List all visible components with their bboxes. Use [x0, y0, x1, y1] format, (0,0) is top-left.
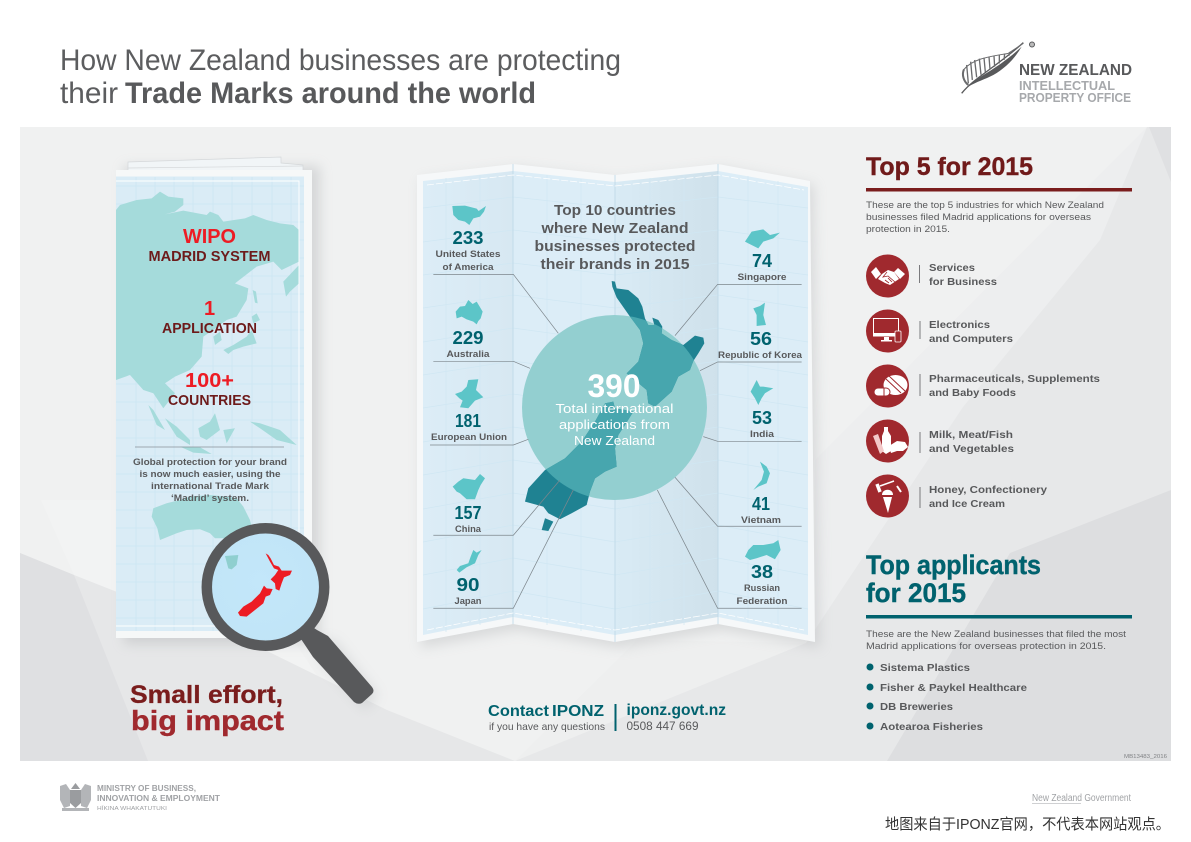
- heading: Top 5 for 2015: [866, 153, 1033, 181]
- country figures right: Russian: [744, 583, 780, 594]
- WIPO heading: [148, 226, 270, 409]
- registered mark: [1030, 42, 1034, 47]
- icon: handshake: [866, 254, 909, 298]
- applicant list: [866, 662, 1027, 733]
- industry labels: and Ice Cream: [929, 498, 1005, 510]
- country figures left: United States: [436, 249, 500, 260]
- WIPO heading: 1: [204, 298, 215, 320]
- country figures left: 90: [456, 575, 480, 595]
- country figures left: 233: [452, 228, 484, 248]
- map heading: [534, 203, 696, 273]
- country figures left: China: [455, 524, 482, 535]
- applicant list: DB Breweries: [880, 701, 953, 713]
- intro text: businesses filed Madrid applications for overseas: [866, 212, 1092, 222]
- chart: total circle: [522, 315, 707, 500]
- WIPO heading: APPLICATION: [162, 320, 257, 337]
- icon: magnifying glass over New Zealand: [207, 528, 378, 710]
- country figures left: 181: [455, 411, 481, 431]
- icon: computer: [866, 310, 909, 352]
- icon: crest: [60, 783, 91, 811]
- ministry name: [97, 784, 220, 812]
- country figures left: Australia: [446, 349, 490, 360]
- brochure description: [133, 457, 287, 504]
- panel: Top applicants: [866, 550, 1132, 733]
- map: Asia and Australia: [116, 192, 299, 545]
- WIPO heading: WIPO: [183, 226, 236, 248]
- industry labels: and Computers: [929, 333, 1013, 345]
- map heading: their brands in 2015: [540, 257, 690, 273]
- total applications: [556, 368, 674, 448]
- slogan: Small effort, big impact: [130, 681, 284, 736]
- country figures left: Japan: [454, 596, 482, 607]
- country figures right: 74: [752, 251, 772, 271]
- brochure inner border: [116, 181, 299, 626]
- intro text: [866, 200, 1104, 234]
- brochure description: ‘Madrid’ system.: [171, 493, 249, 504]
- title: Trade Marks around the world: [125, 77, 536, 110]
- title: How New Zealand businesses are protecting: [60, 44, 621, 77]
- country figures right: 38: [751, 562, 773, 582]
- country figures right: Federation: [736, 596, 788, 607]
- logo wordmark: NEW ZEALAND: [1019, 62, 1132, 79]
- map disclaimer: 地图来自于IPONZ官网，不代表本网站观点。: [885, 816, 1170, 833]
- industry labels: for Business: [929, 276, 997, 288]
- brochure description: is now much easier, using the: [140, 469, 280, 480]
- logo wordmark: [1019, 62, 1132, 105]
- map heading: where New Zealand: [540, 221, 688, 237]
- panel: WIPO brochure: [116, 157, 320, 644]
- leader lines: [430, 274, 802, 608]
- map grid: [423, 175, 808, 632]
- country figures right: Republic of Korea: [718, 350, 803, 361]
- document code: MB13483_2016: [1124, 754, 1167, 760]
- dividers: [918, 265, 921, 508]
- brochure grid: [116, 177, 304, 631]
- total applications: Total international: [556, 401, 674, 416]
- intro text: These are the New Zealand businesses that filed the most: [866, 629, 1127, 639]
- contact block: [488, 702, 726, 733]
- map folds: [513, 164, 718, 642]
- heading: [866, 550, 1041, 608]
- applicant list: Sistema Plastics: [880, 662, 970, 674]
- country figures right: [718, 251, 803, 607]
- country figures right: Singapore: [738, 272, 786, 283]
- logo: New Zealand Intellectual Property Office: [962, 42, 1132, 105]
- brochure description: international Trade Mark: [151, 481, 270, 492]
- intro text: [866, 629, 1127, 651]
- country figures left: of America: [442, 262, 494, 273]
- ministry name: INNOVATION & EMPLOYMENT: [97, 794, 220, 803]
- contact block: if you have any questions: [489, 721, 605, 733]
- country figures left: European Union: [431, 432, 507, 443]
- map: New Zealand: [525, 281, 704, 531]
- industry labels: Honey, Confectionery: [929, 484, 1047, 496]
- contact block: IPONZ: [552, 703, 605, 720]
- industry labels: Pharmaceuticals, Supplements: [929, 373, 1100, 385]
- country figures right: 53: [752, 408, 772, 428]
- slogan: Small effort, big impact: big impact: [131, 705, 284, 736]
- contact block: Contact: [488, 703, 549, 720]
- slogan: Small effort, big impact: Small effort,: [130, 681, 283, 709]
- magnifier handle: [301, 626, 374, 704]
- total applications: New Zealand: [574, 433, 655, 448]
- title: their: [60, 77, 118, 110]
- map heading: Top 10 countries: [554, 203, 676, 219]
- WIPO heading: MADRID SYSTEM: [148, 248, 270, 265]
- heading: Top applicants: [866, 550, 1041, 580]
- country figures right: 41: [752, 494, 770, 514]
- country figures right: Vietnam: [741, 515, 781, 526]
- panel: main background: [20, 127, 1171, 761]
- contact block: iponz.govt.nz: [626, 702, 726, 719]
- map: New Zealand inside circle: [546, 316, 694, 496]
- industry labels: and Baby Foods: [929, 387, 1016, 399]
- contact block: 0508 447 669: [626, 719, 699, 733]
- country figures left: [431, 228, 507, 607]
- applicant list: Aotearoa Fisheries: [880, 721, 983, 733]
- WIPO heading: 100+: [185, 370, 234, 392]
- country figures right: 56: [750, 329, 772, 349]
- footer: Ministry logo: [60, 783, 220, 812]
- industry labels: and Vegetables: [929, 443, 1014, 455]
- brochure back pages: [128, 157, 303, 171]
- title: [60, 44, 621, 110]
- icon: pills: [866, 364, 909, 408]
- map panels: [423, 171, 808, 635]
- brochure description: Global protection for your brand: [133, 457, 287, 468]
- country figures right: India: [750, 429, 775, 440]
- applicant list: Fisher & Paykel Healthcare: [880, 682, 1027, 694]
- industry labels: [929, 262, 1100, 510]
- intro text: These are the top 5 industries for which New Zealand: [866, 200, 1104, 210]
- icon: honey and ice cream: [866, 474, 909, 518]
- total applications: applications from: [559, 417, 670, 432]
- panel: Top 5 for 2015: [866, 153, 1132, 518]
- icon: milk, meat and vegetables: [866, 420, 909, 462]
- WIPO heading: COUNTRIES: [168, 392, 251, 409]
- total applications: 390: [588, 368, 640, 404]
- country figures left: 229: [452, 328, 484, 348]
- ministry name: MINISTRY OF BUSINESS,: [97, 784, 196, 793]
- industry labels: Electronics: [929, 319, 990, 331]
- footer: New Zealand Government: New Zealand Government: [1032, 793, 1131, 804]
- industry labels: Services: [929, 262, 975, 274]
- industry labels: Milk, Meat/Fish: [929, 429, 1013, 441]
- icon: silver fern: [962, 43, 1023, 93]
- logo wordmark: INTELLECTUAL: [1019, 78, 1115, 93]
- map heading: businesses protected: [534, 239, 696, 255]
- intro text: protection in 2015.: [866, 224, 950, 234]
- icons: country silhouettes: [452, 206, 781, 573]
- country figures left: 157: [454, 503, 482, 523]
- logo wordmark: PROPERTY OFFICE: [1019, 90, 1131, 105]
- intro text: Madrid applications for overseas protection in 2015.: [866, 641, 1106, 651]
- panel: folded map: [417, 164, 820, 648]
- heading: for 2015: [866, 578, 966, 608]
- ministry name: HĪKINA WHAKATUTUKI: [97, 805, 168, 812]
